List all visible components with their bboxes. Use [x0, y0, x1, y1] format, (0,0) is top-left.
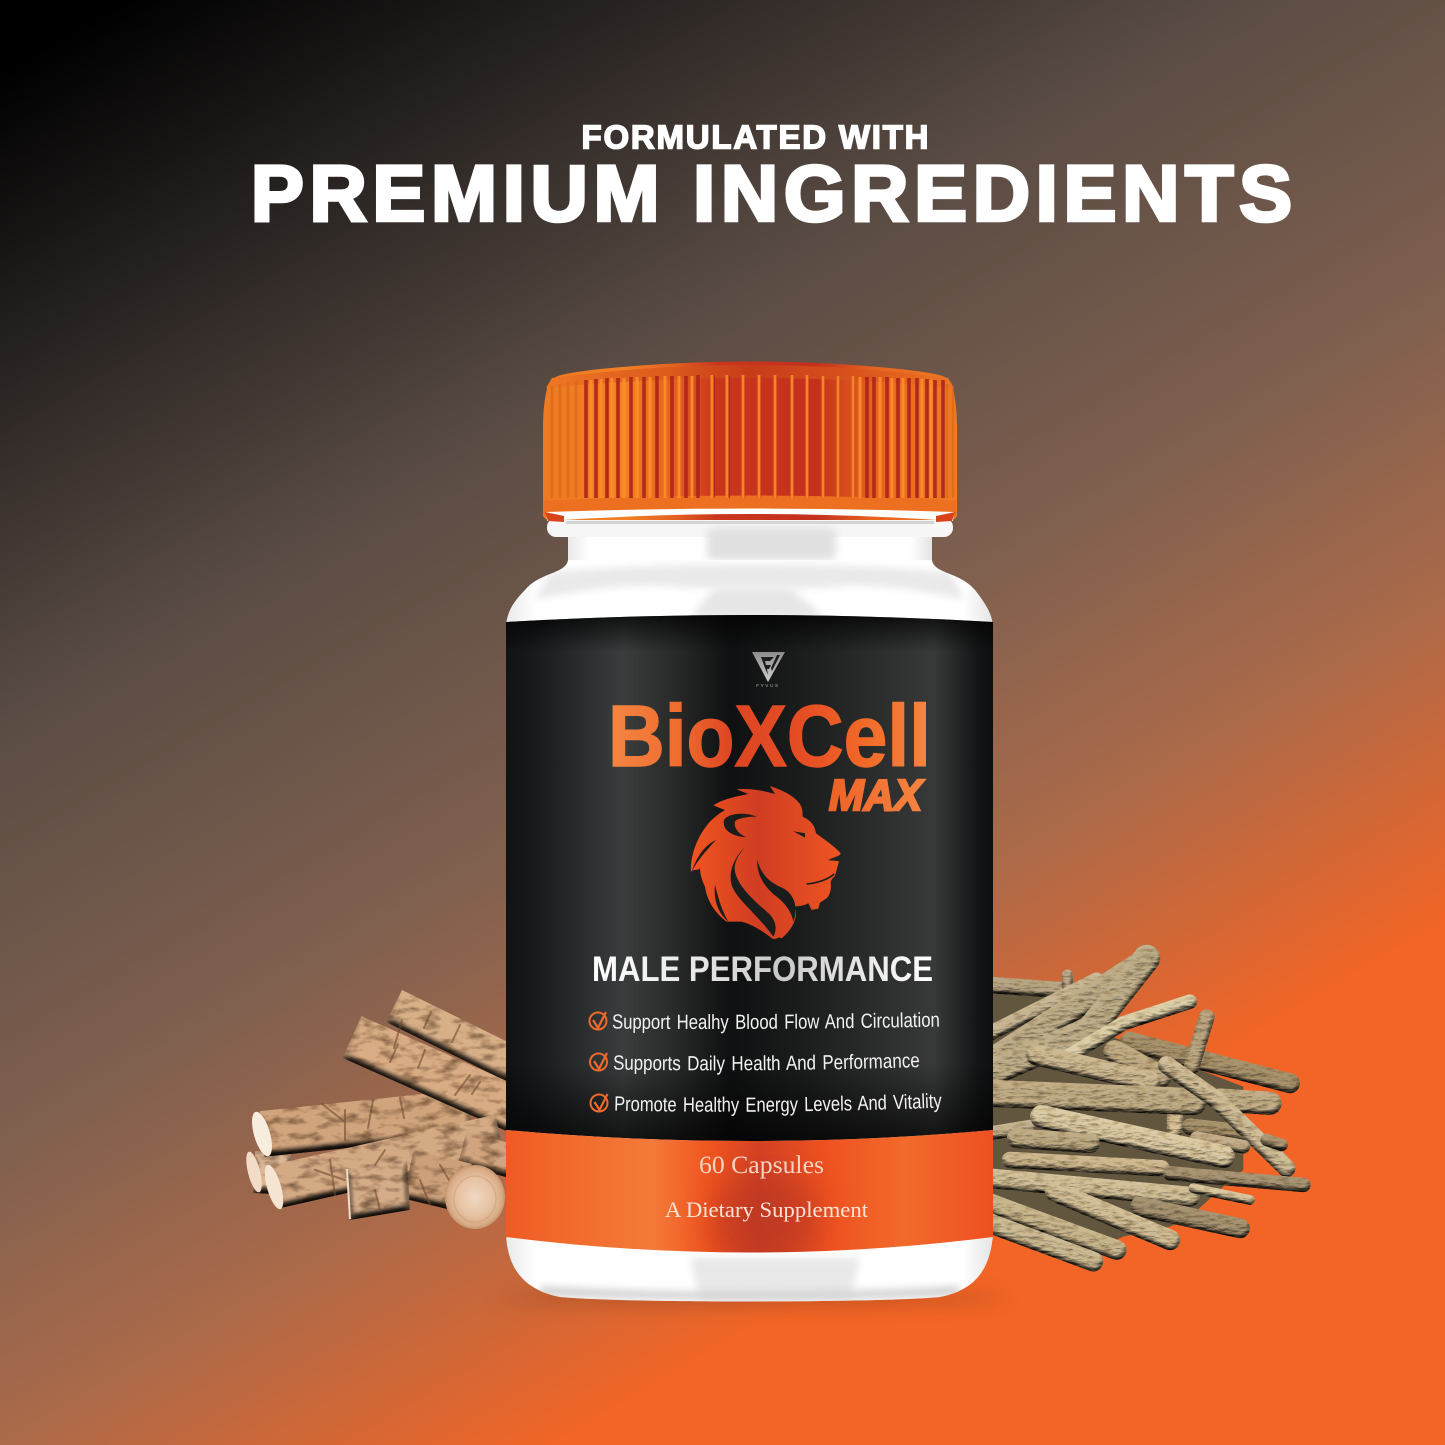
- label black panel: [506, 615, 993, 1141]
- stick: [1167, 1065, 1287, 1168]
- stick: [990, 967, 1137, 1062]
- stick: [990, 1203, 1117, 1250]
- log: upper back: [394, 1006, 520, 1068]
- cap lip notch left: [545, 512, 564, 522]
- bottle body: [506, 560, 993, 1302]
- stick: [990, 1178, 1190, 1197]
- icon: lion head: [691, 786, 841, 939]
- cap rib highlights: [591, 375, 931, 498]
- log: short right: [408, 1174, 466, 1188]
- stick: [1190, 1127, 1250, 1133]
- stick: [1037, 1055, 1150, 1082]
- log: round cut end: [445, 1165, 505, 1229]
- logo: FYVUS: [756, 683, 780, 688]
- right ingredient: pale root sticks: [990, 958, 1303, 1262]
- stick: [990, 985, 1060, 990]
- stick: [1115, 1052, 1160, 1077]
- stick: [1042, 1117, 1223, 1157]
- benefit 2: Supports Daily Health And Performance: [614, 1054, 919, 1075]
- stick: [1140, 1207, 1240, 1228]
- bottle cap: [543, 362, 957, 522]
- icon: check: [590, 1094, 608, 1112]
- stick: [1220, 1100, 1270, 1103]
- stick: [1055, 1192, 1170, 1240]
- stick: [1150, 1117, 1200, 1130]
- stick: [1050, 975, 1084, 987]
- benefit 1: Support Healhy Blood Flow And Circulation: [612, 1012, 939, 1034]
- stick: [990, 980, 1097, 1033]
- log: lower long: [261, 1136, 500, 1211]
- stick: [1065, 1002, 1190, 1058]
- cap lip notch right: [936, 512, 955, 522]
- band shadow: [710, 1170, 820, 1270]
- title line: formulated with: FORMULATED WITH: [582, 118, 928, 156]
- stick: [1170, 1173, 1303, 1185]
- stick: [990, 1127, 1030, 1133]
- bark streaks: [315, 1012, 480, 1210]
- icon: check: [590, 1053, 607, 1070]
- bottle ground shadow: [495, 1291, 1005, 1305]
- stick: [1017, 1138, 1090, 1143]
- brand max: MAX: [829, 771, 925, 820]
- supplement line: A Dietary Supplement: [665, 1197, 869, 1222]
- logo: [752, 652, 785, 688]
- stick: [1130, 1042, 1290, 1083]
- pile underlay: [990, 983, 1243, 1250]
- bottle: [506, 362, 993, 1302]
- left ingredient: bark root logs: [243, 1006, 520, 1229]
- capsule count: 60 Capsules: [699, 1150, 824, 1179]
- bottle shoulder shading: [535, 564, 965, 1300]
- stick: [1192, 1017, 1207, 1067]
- title line: premium ingredients: PREMIUM INGREDIENTS: [251, 148, 1292, 238]
- cap faint ribs: [552, 381, 953, 498]
- log: back end stub: [243, 1150, 290, 1194]
- stick: [990, 1223, 1093, 1262]
- log: front short block: [347, 1158, 410, 1220]
- log: upper front: [352, 1037, 520, 1112]
- stick: [1197, 1138, 1243, 1147]
- stick: [990, 1093, 1193, 1102]
- log: right upper stub: [462, 1148, 515, 1162]
- cap ribs: [586, 375, 943, 498]
- stick: [1193, 1188, 1250, 1200]
- benefit 3: Promote Healthy Energy Levels And Vitality: [615, 1093, 942, 1116]
- log: middle long: [248, 1110, 470, 1158]
- label: [506, 615, 993, 1252]
- label orange band: [506, 1130, 993, 1252]
- stick: [1010, 1160, 1162, 1168]
- icon: check: [590, 1012, 606, 1030]
- stick: [990, 958, 1147, 1073]
- stick: [1267, 1140, 1282, 1145]
- product type heading: MALE PERFORMANCE: [592, 950, 933, 989]
- title: [251, 118, 1292, 238]
- label edge shading: [506, 615, 993, 1141]
- brand name: BioXCell: [608, 688, 931, 785]
- bottle neck and rim: [547, 518, 953, 578]
